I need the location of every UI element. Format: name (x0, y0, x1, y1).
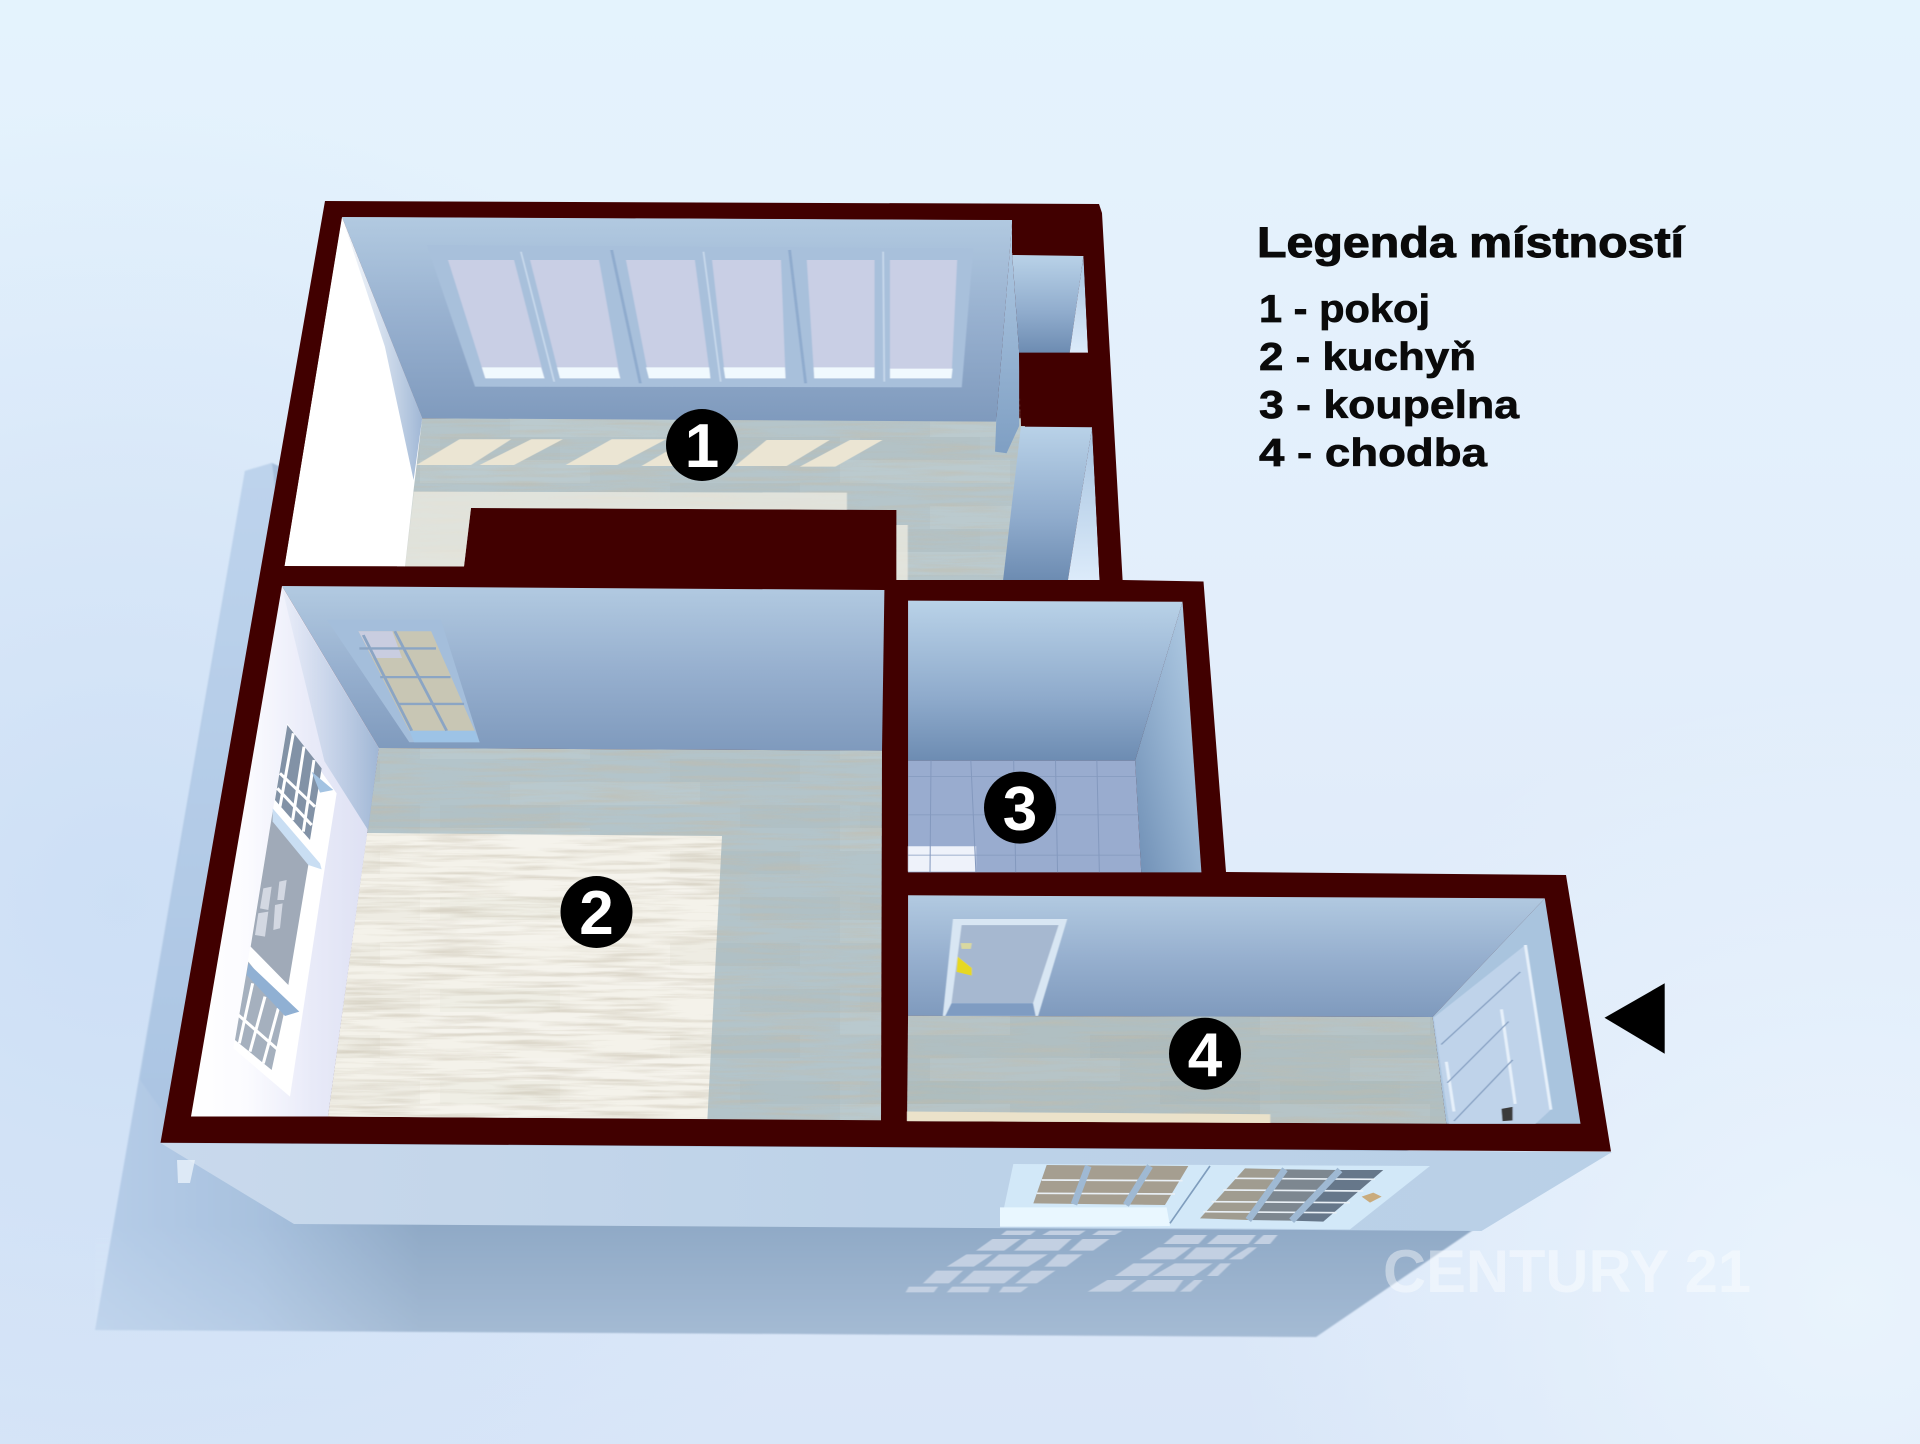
room 1 back wall (342, 217, 1012, 422)
room 2 sun patch (328, 833, 722, 1119)
room 2 wood grain (320, 745, 890, 1125)
legend item 1: 1 - pokoj (1259, 288, 1430, 331)
legend item 3: 3 - koupelna (1259, 384, 1519, 427)
entrance arrow (1604, 983, 1665, 1054)
room 2 left wall (191, 586, 379, 1116)
room 1 sun stripes (416, 439, 883, 467)
room 4 wood grain (907, 1016, 1438, 1123)
window light patches on the ground (906, 1231, 1278, 1292)
legend (1257, 219, 1686, 475)
marker 4 (1169, 1018, 1241, 1090)
marker 2 (560, 876, 632, 948)
marker 3 (984, 772, 1056, 844)
panel: room 3 (koupelna) (908, 601, 1201, 872)
room 1 floor (394, 418, 1025, 587)
room 2 back wall (282, 586, 884, 751)
marker 1 (666, 409, 738, 481)
legend heading: Legenda místností (1257, 219, 1686, 267)
interior door (943, 919, 1067, 1016)
exterior window (1000, 1164, 1430, 1229)
exterior front wall (160, 1143, 1612, 1231)
marker 3: 3 (1003, 775, 1037, 844)
watermark: Century 21: CENTURY 21 (1383, 1238, 1751, 1305)
room 2 side windows (233, 723, 337, 1097)
panel: room 2 (kuchyň) (191, 586, 890, 1125)
room 4 side wall (1433, 898, 1581, 1124)
legend item 2: 2 - kuchyň (1259, 336, 1476, 379)
alcove upper (1012, 255, 1088, 353)
panel: room 4 (chodba) (900, 895, 1581, 1130)
marker 2: 2 (579, 879, 614, 948)
room 1 balcony door frame (427, 245, 973, 387)
marker 1: 1 (685, 412, 719, 481)
ground shadow (95, 463, 1495, 1337)
room 1 column (995, 220, 1019, 453)
room 3 side wall (1135, 602, 1201, 872)
room 1 left wall (284, 217, 422, 567)
room 3 tiled floor (908, 761, 1141, 872)
room 3 back wall (908, 601, 1183, 761)
marker 4: 4 (1188, 1021, 1223, 1090)
structural walls (section cut) (160, 201, 1611, 1152)
room 4 floor (907, 1016, 1446, 1124)
panel: room 1 (pokoj) (284, 217, 1100, 587)
room 1 sun patch (402, 492, 908, 587)
room 4 back wall (908, 895, 1545, 1017)
entrance door (1434, 945, 1551, 1124)
room 2 floor (328, 748, 882, 1120)
alcove lower (1003, 427, 1100, 580)
room 4 sun strip (907, 1112, 1270, 1123)
room 2 back window (327, 620, 480, 742)
legend item 4: 4 - chodba (1259, 432, 1487, 475)
